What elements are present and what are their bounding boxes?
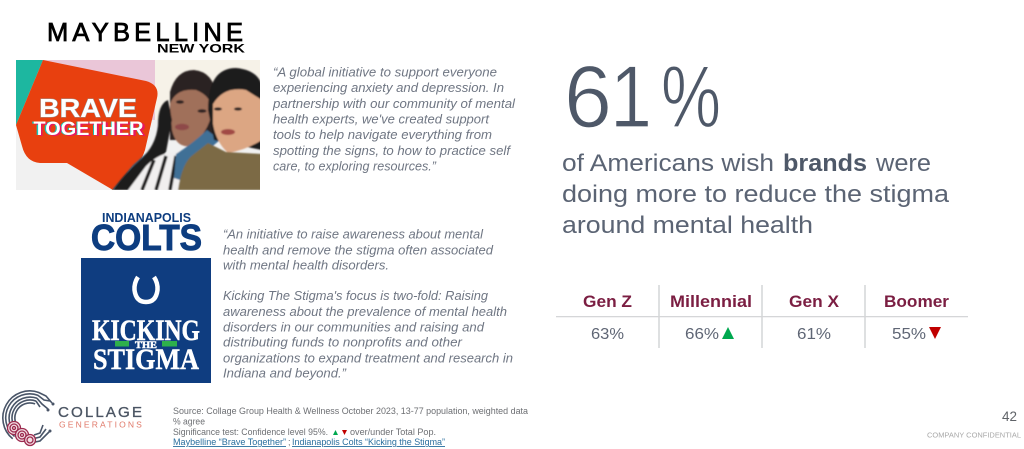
logo: Indianapolis Colts: COLTS [91, 217, 202, 258]
column: Gen X: 61% [797, 326, 831, 343]
quote: Colts: organizations to expand treatment and research in [223, 351, 513, 365]
logo: Collage Generations: GENERATIONS [59, 420, 144, 430]
column: Boomer [884, 292, 949, 343]
column: Millennial: 66% [685, 326, 719, 343]
source note: over/under Total Pop. [350, 427, 436, 437]
badge wordmark [92, 314, 200, 376]
quote: Colts: Indiana and beyond.” [223, 367, 347, 381]
left woman [170, 70, 216, 140]
quote: Maybelline: care, to exploring resources.” [273, 160, 437, 174]
column: Boomer: Boomer [884, 292, 949, 311]
statement text [562, 150, 950, 239]
right woman [208, 68, 262, 150]
source note: Indianapolis Colts “Kicking the Stigma” [292, 437, 445, 447]
source note: Source: Collage Group Health & Wellness October 2023, 13-77 population, weighted data [173, 406, 528, 416]
quote: Colts: distributing funds to nonprofits and other [223, 336, 463, 350]
campaign title: Brave Together: TOGETHER [32, 118, 143, 140]
statement text: doing more to reduce the stigma [562, 181, 950, 208]
speech bubble [16, 60, 158, 190]
logo: Collage Generations [3, 391, 144, 446]
badge wordmark: THE [135, 341, 157, 351]
quote: Colts: with mental health disorders. [223, 258, 389, 272]
headline stat: 61%: 1 [610, 47, 652, 146]
column: Gen Z: Gen Z [583, 292, 632, 311]
campaign title: Brave Together: TOGETHER [34, 118, 144, 140]
quote: Colts: Kicking The Stigma's focus is two-fold: Raising [223, 289, 488, 303]
confidentiality note: COMPANY CONFIDENTIAL [927, 430, 1021, 440]
campaign title: Brave Together: BRAVE [39, 95, 137, 123]
quote: Maybelline: health experts, we've created support [273, 112, 490, 126]
column: Boomer: 55% [892, 326, 926, 343]
quote: Colts: “An initiative to raise awareness about mental [223, 227, 484, 241]
quote: Maybelline: spotting the signs, to how to practice self [273, 144, 512, 158]
quote: Colts: awareness about the prevalence of mental health [223, 305, 507, 319]
column: Gen Z [583, 292, 632, 343]
statement text: were [875, 150, 931, 177]
logo: Indianapolis Colts: INDIANAPOLIS [102, 211, 191, 225]
source note: Maybelline “Brave Together” [173, 437, 286, 447]
statement text: of Americans wish [562, 150, 774, 177]
quote: Maybelline: experiencing anxiety and depression. In [273, 81, 504, 95]
source note: Significance test: Confidence level 95%. [173, 427, 328, 437]
logo: Maybelline New York: NEW YORK [157, 44, 246, 56]
statement text: around mental health [562, 212, 813, 239]
campaign title: Brave Together: TOGETHER [35, 119, 146, 141]
column: Gen X [789, 292, 840, 343]
logo: Collage Generations: COLLAGE [58, 404, 144, 421]
table: results by generation [556, 285, 968, 348]
badge wordmark: KICKING [92, 314, 200, 347]
quote: Maybelline: tools to help navigate everything from [273, 128, 492, 142]
badge: Kicking the Stigma [81, 258, 211, 383]
headline stat: 61%: % [661, 47, 721, 146]
badge wordmark: STIGMA [93, 343, 199, 376]
quote: Maybelline: partnership with our community of mental [272, 97, 516, 111]
source note [173, 406, 528, 447]
photo: Brave Together campaign image [16, 60, 262, 190]
column: Millennial: Millennial [670, 292, 752, 311]
column: Millennial [670, 292, 752, 343]
logo: Maybelline New York: MAYBELLINE [47, 19, 243, 47]
icon: horseshoe [134, 277, 158, 302]
column: Gen X: Gen X [789, 292, 840, 311]
source note: ; [288, 437, 291, 447]
page number: 42 [1002, 408, 1017, 424]
quote: Colts: disorders in our communities and raising and [223, 321, 485, 335]
quote: Maybelline [272, 66, 516, 174]
column: Gen Z: 63% [591, 326, 624, 343]
headline stat: 61% [564, 47, 721, 146]
quote: Colts: health and remove the stigma often associated [223, 243, 494, 257]
headline stat: 61%: 6 [564, 47, 612, 146]
statement text: brands [783, 150, 867, 177]
quote: Maybelline: “A global initiative to support everyone [273, 66, 497, 80]
campaign title: Brave Together [32, 98, 146, 136]
source note: % agree [173, 416, 205, 426]
quote: Colts [223, 227, 513, 381]
